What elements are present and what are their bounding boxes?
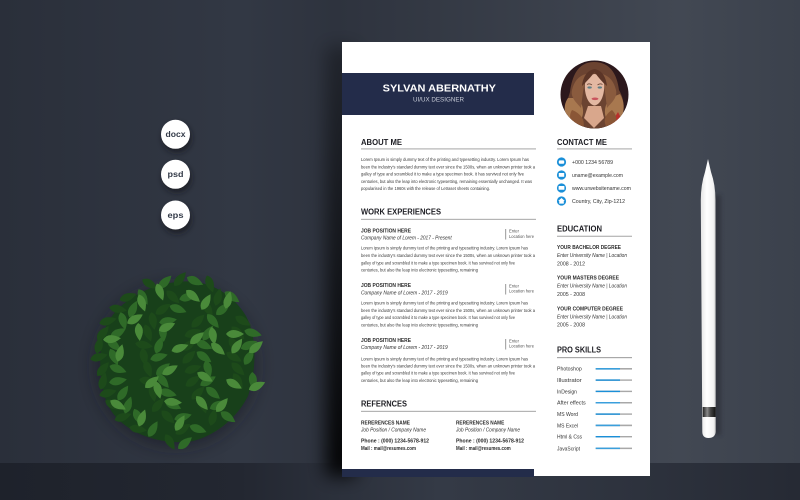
heading: references: REFERNCES (361, 399, 407, 409)
heading: pro skills: PRO SKILLS (557, 345, 601, 355)
panel: about me (361, 137, 536, 192)
floor (0, 463, 800, 500)
job entry 3: Lorem Ipsum is simply dummy text of the printing and typesetting industry. Lorem Ipsum has (361, 356, 528, 362)
degree 3: YOUR COMPUTER DEGREE (557, 306, 624, 312)
skill: after effects: After effects (557, 401, 586, 407)
job entry 1: JOB POSITION HERE (361, 228, 412, 234)
contact: website: www.urwebsitename.com (571, 186, 631, 192)
profile photo (560, 60, 630, 130)
reference 2: RERERENCES NAME (456, 420, 505, 426)
degree 1: 2008 - 2012 (557, 261, 585, 267)
reference 2 (455, 420, 524, 452)
job entry 3: Company Name of Lorem - 2017 - 2019 (361, 345, 448, 351)
badge: docx: docx (166, 130, 186, 139)
badge: psd: psd (168, 170, 184, 179)
resume drop shadow (326, 46, 356, 476)
about text: Lorem Ipsum is simply dummy text of the printing and typesetting industry. Lorem Ipsum has (361, 157, 529, 163)
skill: ms excel: MS Excel (557, 423, 578, 429)
degree 2: YOUR MASTERS DEGREE (557, 276, 620, 282)
about text (361, 157, 535, 192)
job entry 2 (361, 283, 535, 329)
reference 2: Job Position / Company Name (455, 427, 520, 433)
about text: centuries, but also the leap into electronic typesetting, remaining essentially unchanged. It was (361, 179, 532, 185)
heading: work experiences: WORK EXPERIENCES (361, 207, 441, 217)
skill: indesign: InDesign (557, 389, 577, 395)
job entry 3: been the industry's standard dummy text ever since the 1500s, when an unknown printer took a (361, 364, 535, 370)
degree 2: 2005 - 2008 (557, 292, 585, 298)
pencil shadow (712, 195, 721, 435)
reference 1: Mail : mail@resumes.com (361, 446, 416, 452)
reference 1 (360, 420, 429, 452)
job entry 1: Lorem Ipsum is simply dummy text of the printing and typesetting industry. Lorem Ipsum has (361, 246, 528, 252)
heading: contact me: CONTACT ME (557, 137, 607, 147)
job entry 3: JOB POSITION HERE (361, 338, 412, 344)
job entry 1 (361, 228, 535, 274)
skill: ms word: MS Word (557, 412, 578, 418)
job entry 2: been the industry's standard dummy text ever since the 1500s, when an unknown printer took a (361, 308, 535, 314)
contact: phone: +000 1234 56789 (572, 160, 613, 166)
footer bar (342, 469, 534, 477)
reference 1: RERERENCES NAME (361, 420, 411, 426)
stylus pencil (701, 159, 716, 438)
job entry 1: Location here (509, 234, 535, 239)
degree 2 (557, 276, 627, 298)
job title: UI/UX DESIGNER (413, 96, 464, 103)
job entry 2: Company Name of Lorem - 2017 - 2019 (361, 290, 448, 296)
panel: education (557, 224, 632, 329)
degree 3: Enter University Name | Location (557, 314, 627, 320)
job entry 2: centuries, but also the leap into electronic typesetting, remaining (361, 323, 478, 329)
panel: pro skills (557, 345, 632, 452)
reference 2: Phone : (000) 1234-5678-912 (456, 439, 524, 445)
degree 3: 2005 - 2008 (557, 323, 585, 329)
reference 2: Mail : mail@resumes.com (456, 446, 511, 452)
skill: html and css: Html & Css (557, 435, 582, 441)
reference 1: Job Position / Company Name (360, 427, 426, 433)
skill: javascript: JavaScript (557, 446, 580, 452)
skill: illustrator: Illustrator (557, 378, 582, 384)
panel: work experiences (361, 207, 536, 384)
job entry 1: centuries, but also the leap into electronic typesetting, remaining (361, 268, 478, 274)
reference 1: Phone : (000) 1234-5678-912 (361, 439, 429, 445)
job entry 3: galley of type and scrambled it to make a type specimen book. It has survived not only five (361, 371, 515, 377)
about text: been the industry's standard dummy text ever since the 1500s, when an unknown printer took a (361, 164, 535, 170)
contact: email: uname@example.com (572, 173, 623, 179)
about text: popularised in the 1960s with the release of Letraset sheets containing. (361, 186, 490, 192)
panel: references (360, 399, 536, 452)
panel: contact me (557, 137, 632, 206)
degree 3 (557, 306, 627, 329)
badge: eps: eps (168, 211, 184, 220)
job entry 2: JOB POSITION HERE (361, 283, 412, 289)
job entry 3 (361, 338, 535, 384)
job entry 1: Enter (509, 229, 520, 234)
job entry 2: Location here (509, 289, 535, 294)
resume page (342, 42, 650, 477)
file format badges (161, 120, 192, 234)
plant shadow (94, 284, 258, 448)
job entry 2: galley of type and scrambled it to make a type specimen book. It has survived not only five (361, 315, 515, 321)
heading: education: EDUCATION (557, 224, 602, 234)
degree 1: Enter University Name | Location (557, 253, 627, 259)
job entry 3: centuries, but also the leap into electronic typesetting, remaining (361, 378, 478, 384)
job entry 2: Enter (509, 284, 520, 288)
degree 1 (557, 245, 627, 267)
name: SYLVAN ABERNATHY (383, 83, 496, 94)
job entry 3: Enter (509, 338, 520, 344)
job entry 1: Company Name of Lorem - 2017 - Present (361, 236, 452, 242)
skill: photoshop: Photoshop (557, 367, 582, 373)
degree 1: YOUR BACHELOR DEGREE (557, 245, 622, 251)
job entry 1: galley of type and scrambled it to make a type specimen book. It has survived not only five (361, 260, 515, 266)
contact: address: Country, City, Zip-1212 (572, 199, 625, 205)
job entry 1: been the industry's standard dummy text ever since the 1500s, when an unknown printer took a (361, 253, 535, 259)
job entry 2: Lorem Ipsum is simply dummy text of the printing and typesetting industry. Lorem Ipsum has (361, 301, 528, 307)
job entry 3: Location here (509, 344, 535, 349)
about text: galley of type and scrambled it to make a type specimen book. It has survived not only five (361, 172, 524, 178)
heading: about me: ABOUT ME (361, 137, 402, 147)
plant (89, 270, 267, 452)
degree 2: Enter University Name | Location (557, 284, 627, 290)
header banner (342, 73, 534, 115)
